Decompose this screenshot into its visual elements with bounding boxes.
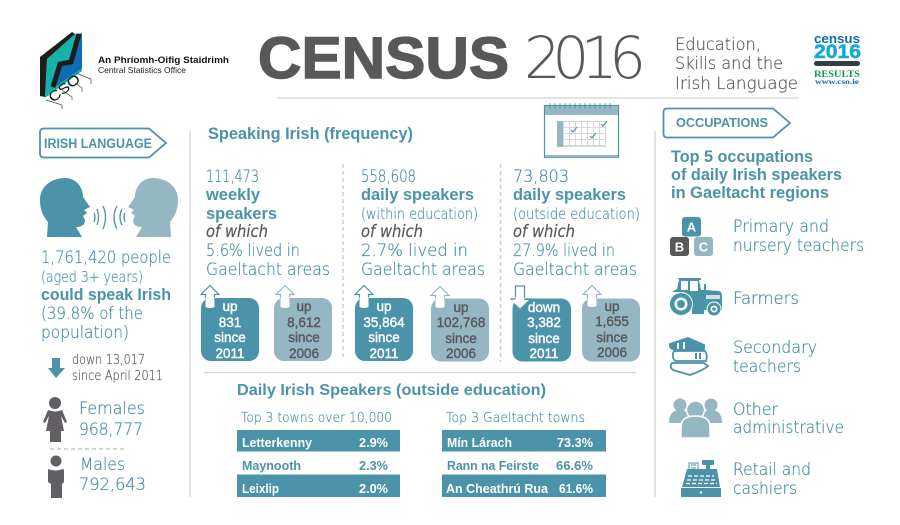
change box: down 3,382 since 2011: 3,382 xyxy=(527,315,561,330)
change box: up 8,612 since 2006: since xyxy=(288,330,320,345)
logo: census 2016 results: 2016 xyxy=(814,42,861,63)
heading: Daily Irish Speakers: Daily Irish Speakers (outside education) xyxy=(237,382,546,399)
text: daily speakers outside education xyxy=(513,167,640,280)
text: daily speakers within education: 558,608 xyxy=(361,167,416,187)
text: daily speakers outside education: daily speakers xyxy=(513,185,626,204)
text: males: 792,643 xyxy=(79,475,146,495)
text: daily speakers within education: daily speakers xyxy=(361,185,474,204)
text: retail and cashiers: Retail and xyxy=(733,460,811,480)
text: daily speakers within education: of which xyxy=(361,222,423,242)
text: people who could speak Irish: (39.8% of the xyxy=(41,304,143,324)
icon: cash register xyxy=(681,460,721,497)
icon: female xyxy=(43,397,67,442)
heading: Top 5 occupations xyxy=(671,147,842,202)
text: people who could speak Irish: population) xyxy=(41,323,129,343)
change box: up 1,655 since 2006: 2006 xyxy=(597,345,627,360)
text: down since April 2011: since April 2011 xyxy=(72,369,163,384)
logo: Central Statistics Office: Central Statistics Office xyxy=(98,65,186,75)
heading: Top 5 occupations: in Gaeltacht regions xyxy=(671,183,829,202)
text: people who could speak Irish: 1,761,420 people xyxy=(41,248,171,268)
title: Census 2016: 2016 xyxy=(524,24,646,92)
title: Census 2016: CENSUS xyxy=(258,26,509,91)
logo: census 2016 results: census xyxy=(814,31,860,46)
icon: male xyxy=(48,456,64,498)
text: daily speakers outside education: of which xyxy=(513,222,575,242)
icon: two speaking heads xyxy=(40,178,178,237)
logo: census 2016 results: RESULTS xyxy=(814,70,860,80)
change box: up 831 since 2011 xyxy=(201,286,259,361)
subtitle: Education, Skills and the Irish Language xyxy=(675,35,798,94)
table: top 3 towns over 10,000 xyxy=(237,410,400,497)
text: daily speakers outside education: 27.9% lived in xyxy=(513,241,615,261)
text: people who could speak Irish: could speak Irish xyxy=(41,285,171,304)
text: weekly speakers xyxy=(205,167,330,280)
icon: alphabet blocks: B xyxy=(675,240,684,254)
title: Census 2016 xyxy=(258,24,646,92)
badge: Irish Language: IRISH LANGUAGE xyxy=(44,136,152,151)
table: top 3 towns over 10,000: 2.9% xyxy=(359,435,388,450)
text: secondary teachers: teachers xyxy=(733,357,801,377)
table: top 3 towns over 10,000: Top 3 towns over 10,000 xyxy=(241,410,392,426)
text: farmers: Farmers xyxy=(733,289,799,309)
change box: up 35,864 since 2011: since xyxy=(368,330,400,345)
table: top 3 towns over 10,000: Letterkenny xyxy=(242,435,313,450)
heading: Speaking Irish: Speaking Irish (frequency) xyxy=(208,124,413,143)
text: down since April 2011 xyxy=(72,353,163,384)
text: daily speakers within education: 2.7% lived in xyxy=(361,241,468,261)
logo: Central Statistics Office: An Phríomh-Oifig Staidrimh xyxy=(98,55,229,66)
change box: up 831 since 2011: 831 xyxy=(219,315,241,330)
icon: books xyxy=(670,338,708,375)
table: top 3 towns over 10,000: 2.3% xyxy=(359,458,388,473)
change box: up 35,864 since 2011 xyxy=(355,286,413,361)
change box: down 3,382 since 2011: 2011 xyxy=(529,346,559,361)
table: top 3 towns over 10,000: Maynooth xyxy=(242,458,301,473)
text: males xyxy=(79,455,146,495)
change box: up 102,768 since 2006: 102,768 xyxy=(437,315,485,330)
table: top 3 Gaeltacht towns: 61.6% xyxy=(559,481,593,496)
heading: Top 5 occupations: Top 5 occupations xyxy=(671,147,813,166)
text: weekly speakers: weekly xyxy=(205,185,261,204)
logo: census 2016 results xyxy=(814,31,861,86)
change box: down 3,382 since 2011 xyxy=(511,286,571,362)
change box: up 8,612 since 2006: up xyxy=(296,299,312,314)
text: daily speakers within education xyxy=(361,167,485,280)
change box: up 831 since 2011: 2011 xyxy=(215,346,245,361)
change box: up 102,768 since 2006: up xyxy=(453,300,469,315)
table: top 3 Gaeltacht towns: Mín Lárach xyxy=(447,435,512,450)
text: retail and cashiers xyxy=(733,460,811,499)
badge: Irish Language xyxy=(40,128,166,158)
table: top 3 Gaeltacht towns: 73.3% xyxy=(557,435,593,450)
logo: Central Statistics Office: CSO xyxy=(45,71,83,105)
text: weekly speakers: 5.6% lived in xyxy=(206,241,300,261)
text: daily speakers outside education: Gaeltacht areas xyxy=(513,260,637,280)
text: down since April 2011: down 13,017 xyxy=(72,353,145,368)
icon: alphabet blocks xyxy=(670,217,713,256)
change box: up 1,655 since 2006: up xyxy=(604,299,620,314)
change box: up 35,864 since 2011: up xyxy=(376,299,392,314)
change box: up 831 since 2011: up xyxy=(222,299,238,314)
change box: up 8,612 since 2006: 2006 xyxy=(289,346,319,361)
text: primary and nursery teachers xyxy=(733,217,864,256)
table: top 3 Gaeltacht towns: Top 3 Gaeltacht towns xyxy=(446,410,585,426)
text: retail and cashiers: cashiers xyxy=(733,479,797,499)
subtitle: Education, Skills and the Irish Language: Education, xyxy=(675,35,761,55)
subtitle: Education, Skills and the Irish Language: Skills and the xyxy=(675,54,783,74)
text: females xyxy=(79,399,145,440)
text: daily speakers within education: (within education) xyxy=(361,205,478,223)
subtitle: Education, Skills and the Irish Language: Irish Language xyxy=(675,74,798,94)
text: daily speakers within education: Gaeltacht areas xyxy=(361,260,485,280)
table: top 3 Gaeltacht towns: An Cheathrú Rua xyxy=(446,481,549,496)
icon: alphabet blocks: A xyxy=(687,220,697,234)
icon: group of people xyxy=(669,398,722,438)
change box: up 1,655 since 2006: since xyxy=(596,330,628,345)
change box: up 35,864 since 2011: 2011 xyxy=(369,346,399,361)
table: top 3 Gaeltacht towns xyxy=(442,410,606,497)
arrow: down xyxy=(48,358,65,378)
table: top 3 Gaeltacht towns: 66.6% xyxy=(556,458,593,473)
icon: tractor xyxy=(669,278,722,316)
text: weekly speakers: of which xyxy=(206,222,268,242)
change box: up 8,612 since 2006: 8,612 xyxy=(287,315,321,330)
icon: alphabet blocks: C xyxy=(699,240,709,254)
text: people who could speak Irish xyxy=(41,248,171,343)
change box: down 3,382 since 2011: down xyxy=(528,300,560,315)
change box: up 8,612 since 2006 xyxy=(274,286,332,361)
change box: up 1,655 since 2006 xyxy=(582,286,640,362)
text: weekly speakers: Gaeltacht areas xyxy=(206,260,330,280)
text: females: 968,777 xyxy=(79,420,143,440)
text: secondary teachers xyxy=(733,338,817,377)
change box: up 102,768 since 2006 xyxy=(431,286,489,362)
table: top 3 towns over 10,000: 2.0% xyxy=(359,481,388,496)
text: primary and nursery teachers: nursery teachers xyxy=(733,236,864,256)
text: males: Males xyxy=(80,455,125,475)
table: top 3 towns over 10,000: Leixlip xyxy=(242,481,279,496)
text: secondary teachers: Secondary xyxy=(733,338,817,358)
change box: up 35,864 since 2011: 35,864 xyxy=(363,315,405,330)
text: daily speakers outside education: 73,803 xyxy=(513,167,569,187)
text: other administrative xyxy=(733,400,844,438)
text: females: Females xyxy=(79,399,145,419)
text: people who could speak Irish: (aged 3+ years) xyxy=(41,268,143,286)
logo: Central Statistics Office xyxy=(40,32,229,109)
change box: up 1,655 since 2006: 1,655 xyxy=(595,314,629,329)
change box: up 831 since 2011: since xyxy=(214,330,246,345)
text: weekly speakers: speakers xyxy=(206,204,277,223)
logo: census 2016 results: www.cso.ie xyxy=(815,77,860,86)
text: other administrative: administrative xyxy=(733,418,844,438)
badge: Occupations: OCCUPATIONS xyxy=(676,116,768,130)
text: primary and nursery teachers: Primary and xyxy=(733,217,829,237)
badge: Occupations xyxy=(664,108,790,138)
change box: up 102,768 since 2006: 2006 xyxy=(446,346,476,361)
text: daily speakers outside education: (outside education) xyxy=(513,205,640,223)
text: other administrative: Other xyxy=(733,400,778,420)
text: weekly speakers: 111,473 xyxy=(206,167,259,187)
icon: calendar xyxy=(544,103,618,158)
heading: Top 5 occupations: of daily Irish speakers xyxy=(671,165,842,184)
change box: up 102,768 since 2006: since xyxy=(445,331,477,346)
table: top 3 Gaeltacht towns: Rann na Feirste xyxy=(447,458,539,473)
change box: down 3,382 since 2011: since xyxy=(528,331,560,346)
